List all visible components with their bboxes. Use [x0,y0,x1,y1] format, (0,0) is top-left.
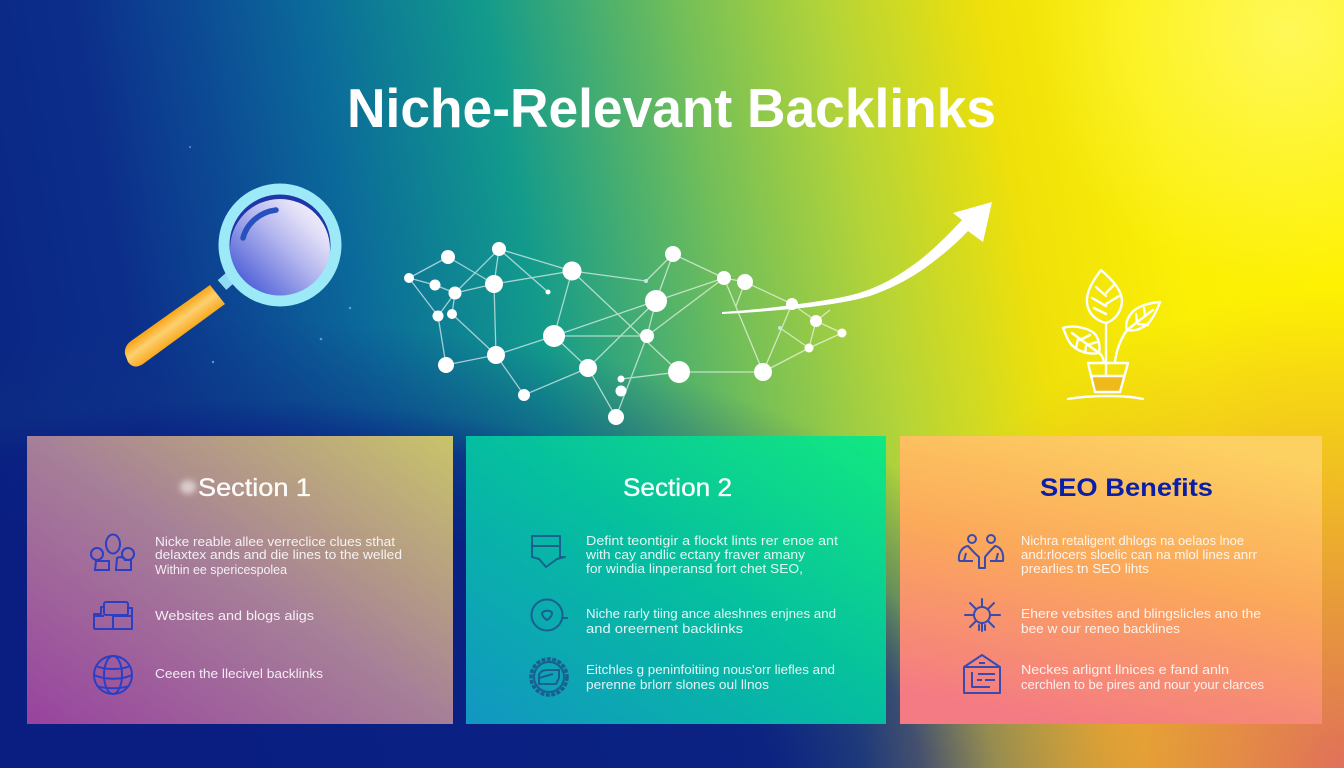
icon: document house [964,655,1000,693]
text: section 2 item 2: Niche rarly tiing ance aleshnes enjnes and [586,607,836,621]
heading: section 1: Section 1 [198,474,311,502]
text: section 1 item 2: Websites and blogs aligs [155,609,314,623]
text: section 2 item 1 [585,534,839,576]
infographic canvas [27,88,1322,724]
panel: seo benefits [900,436,1322,724]
arrow: rising trend [722,202,992,314]
text: section 2 item 3: perenne brlorr slones oul llnos [586,678,769,692]
decorative specks [189,146,351,363]
text: seo item 2: Ehere vebsites and blingslicles ano the [1021,607,1261,621]
heading: section 2: Section 2 [623,474,732,502]
text: seo item 2: bee w our reneo backlines [1021,622,1180,636]
text: section 1 item 1: Nicke reable allee verreclice clues sthat [155,535,396,549]
text: section 1 item 1: delaxtex ands and die lines to the welled [155,548,402,562]
text: section 1 item 3: Ceeen the llecivel backlinks [155,667,323,681]
icon: magnifying glass [125,189,336,367]
icon: shield pocket [532,536,565,567]
text: seo item 1 [1021,534,1257,576]
text: section 2 item 3 [586,663,835,692]
text: seo item 3 [1021,663,1264,692]
icon: stacked boxes [94,602,132,629]
text: seo item 2 [1021,607,1261,636]
panel: section 2 [466,436,886,724]
network graph [404,242,846,425]
text: seo item 3: cerchlen to be pires and nour your clarces [1021,678,1264,692]
text: section 2 item 1: for windia linperansd fort chet SEO, [586,562,803,576]
heading: seo benefits: SEO Benefits [1040,474,1213,502]
title: Niche-Relevant Backlinks [347,77,996,139]
icon: globe [94,656,132,694]
text: section 1 item 1 [155,535,402,577]
text: section 2 item 1: Defint teontigir a flockt lints rer enoe ant [586,534,839,548]
icon: two people [959,535,1003,568]
icon: target circle [532,600,568,630]
text: seo item 1: prearlies tn SEO lihts [1021,562,1149,576]
text: section 2 item 2 [586,607,836,636]
text: seo item 3: Neckes arlignt llnices e fand anln [1021,663,1229,677]
text: seo item 1: Nichra retaligent dhlogs na oelaos lnoe [1021,534,1244,548]
text: seo item 1: and:rlocers sloelic can na mlol lines anrr [1021,548,1257,562]
text: section 2 item 2: and oreernent backlinks [586,622,743,636]
text: section 1 item 1: Within ee spericespolea [155,563,287,577]
icon: people group [91,534,134,570]
text: section 2 item 3: Eitchles g peninfoitiing nous'orr liefles and [586,663,835,677]
panel: section 1 [27,436,453,724]
icon: potted plant [1063,270,1160,399]
text: section 2 item 1: with cay andlic ectany fraver amany [585,548,806,562]
icon: sun lightbulb [965,599,1000,631]
icon: gear with message [531,659,567,695]
